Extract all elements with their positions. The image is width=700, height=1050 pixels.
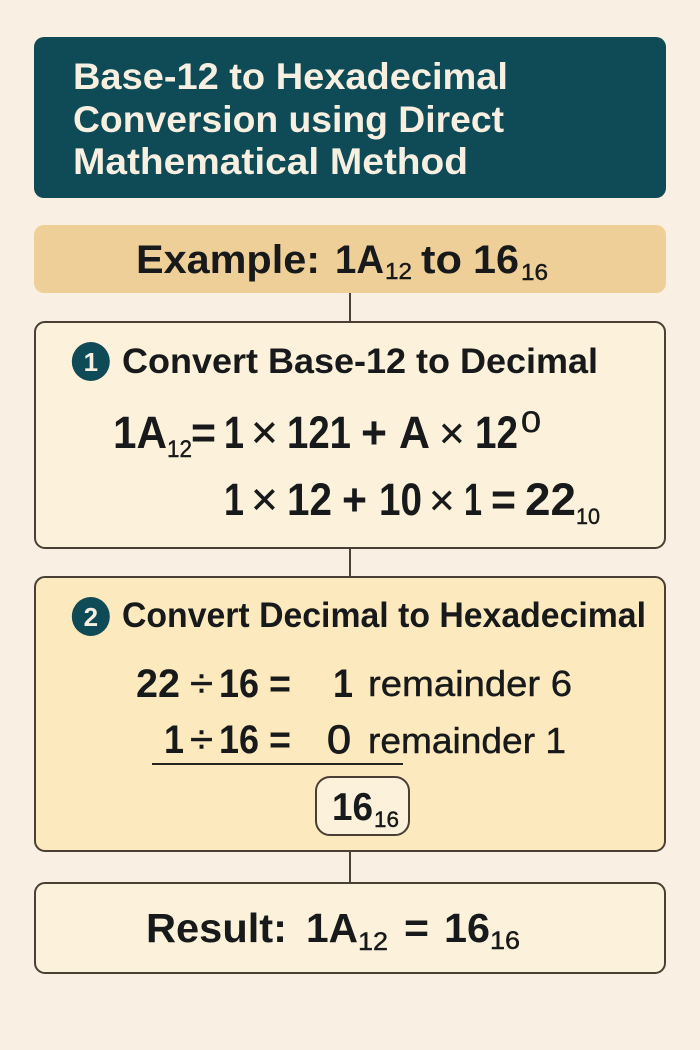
step 1 equation line 1: 1 <box>224 407 244 458</box>
division row 1: = <box>269 662 291 706</box>
step 1 equation line 2: × <box>429 476 455 525</box>
title text <box>73 55 508 182</box>
title banner <box>34 37 666 198</box>
division row 1: 1 <box>333 662 353 706</box>
step 1 equation line 2: 22 <box>525 474 576 525</box>
step 1 equation line 2: 12 <box>287 474 332 525</box>
connector: step 1 to step 2 <box>349 549 351 576</box>
step 1 equation line 1: 12 <box>167 436 192 463</box>
result text: = <box>404 905 429 951</box>
step 1 equation line 2: = <box>491 474 516 525</box>
division row 2: ÷ <box>190 718 213 762</box>
example text: Example: <box>136 238 320 282</box>
step 1 equation line 1: A <box>399 407 430 458</box>
step 1 equation line 2: 10 <box>379 474 422 525</box>
example text: 12 <box>385 258 412 284</box>
boxed hexadecimal answer: 16 <box>374 807 399 832</box>
example text: 16 <box>521 259 548 285</box>
step 2 heading: Convert Decimal to Hexadecimal <box>122 596 646 635</box>
division row 1: ÷ <box>190 662 213 706</box>
division row 2: = <box>269 718 291 762</box>
division row 2: 1 <box>164 718 184 762</box>
division row 1: 22 <box>136 662 180 706</box>
example text: 1A <box>335 238 384 282</box>
step 1 equation line 1: 12 <box>475 407 518 458</box>
step 1 equation line 1: × <box>251 406 278 458</box>
division row 2: 0 <box>327 718 351 762</box>
step 1 equation line 1 <box>113 406 541 463</box>
step 1 equation line 1: 1A <box>113 407 167 458</box>
result text <box>146 905 520 956</box>
step 1 equation line 2: + <box>342 474 367 525</box>
step 1 equation line 1: + <box>361 407 387 458</box>
division row 1 <box>136 662 572 706</box>
example text <box>136 238 548 285</box>
example text: 16 <box>473 238 519 282</box>
step 1 equation line 2: 10 <box>576 504 600 529</box>
division row 1: remainder 6 <box>368 663 572 704</box>
connector: step 2 to result <box>349 852 351 882</box>
division row 2 <box>164 718 566 762</box>
result text: 16 <box>444 905 490 951</box>
example banner <box>34 225 666 293</box>
step 1 equation line 2: 1 <box>464 474 482 525</box>
step 1 equation line 2: 1 <box>224 474 244 525</box>
icon: step 2 number: 2 <box>84 602 98 632</box>
icon: step 2 number <box>72 597 110 636</box>
step 1 heading: Convert Base-12 to Decimal <box>122 342 598 381</box>
division row 2: 16 <box>219 718 259 762</box>
result text: 16 <box>490 927 520 955</box>
example text: to <box>421 238 462 282</box>
step 1 equation line 2 <box>224 473 600 529</box>
step 1 equation line 1: 121 <box>287 407 351 458</box>
division row 2: remainder 1 <box>368 720 566 761</box>
title text: Conversion using Direct <box>73 98 504 140</box>
title text: Base-12 to Hexadecimal <box>73 55 508 97</box>
boxed hexadecimal answer <box>316 777 409 835</box>
result text: Result: <box>146 905 287 951</box>
panel: step 1 <box>35 322 665 548</box>
step 1 equation line 1: × <box>439 409 465 458</box>
division row 1: 16 <box>219 662 259 706</box>
panel: step 2 <box>35 577 665 851</box>
step 1 equation line 1: 0 <box>521 406 541 439</box>
result text: 1A <box>306 905 358 951</box>
connector: example to step 1 <box>349 293 351 321</box>
panel: result <box>35 883 665 973</box>
step 1 equation line 2: × <box>251 473 278 525</box>
result text: 12 <box>358 928 388 956</box>
icon: step 1 number: 1 <box>84 347 98 377</box>
step 1 equation line 1: = <box>191 407 216 458</box>
title text: Mathematical Method <box>73 140 468 182</box>
boxed hexadecimal answer: 16 <box>332 786 373 829</box>
icon: step 1 number <box>72 342 110 381</box>
